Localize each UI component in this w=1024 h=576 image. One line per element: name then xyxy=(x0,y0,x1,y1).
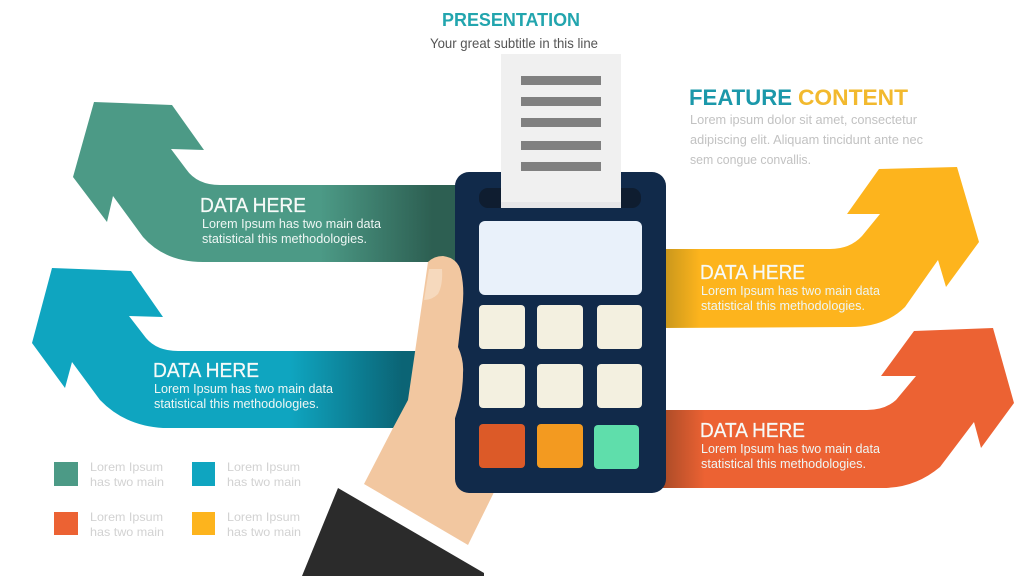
heading: green data: DATA HERE xyxy=(200,195,306,217)
legend item: yellow: Lorem Ipsum xyxy=(227,510,300,524)
text block: teal data xyxy=(154,382,333,411)
title: PRESENTATION xyxy=(442,10,580,30)
icon: payment terminal xyxy=(455,172,666,493)
text block: orange data: statistical this methodologies. xyxy=(701,457,866,471)
legend item: yellow xyxy=(192,510,301,539)
text block: green data xyxy=(202,217,381,246)
heading: feature content xyxy=(689,85,909,110)
arrow: teal xyxy=(32,268,425,428)
legend item: green: has two main xyxy=(90,475,164,489)
panel: orange arrow xyxy=(660,328,1014,488)
terminal body xyxy=(455,172,666,493)
text block: yellow data xyxy=(701,284,880,313)
legend item: green xyxy=(54,460,164,489)
title xyxy=(430,10,598,51)
panel: green arrow xyxy=(73,102,460,262)
panel: yellow arrow xyxy=(660,167,979,328)
keypad xyxy=(479,305,642,469)
legend item: teal: has two main xyxy=(227,475,301,489)
title: Your great subtitle in this line xyxy=(430,35,598,51)
text block: orange data xyxy=(701,442,880,471)
heading: feature content: CONTENT xyxy=(798,85,909,110)
icon: suit sleeve xyxy=(302,488,484,576)
legend item: green: Lorem Ipsum xyxy=(90,460,163,474)
text block: orange data: Lorem Ipsum has two main data xyxy=(701,442,880,456)
text block: feature description: sem congue convallis. xyxy=(690,153,811,167)
panel: feature content xyxy=(689,85,923,167)
legend item: teal: Lorem Ipsum xyxy=(227,460,300,474)
text block: green data: Lorem Ipsum has two main data xyxy=(202,217,381,231)
text block: teal data: Lorem Ipsum has two main data xyxy=(154,382,333,396)
panel: teal arrow xyxy=(32,268,425,428)
text block: feature description: adipiscing elit. Aliquam tincidunt ante nec xyxy=(690,133,923,147)
arrow: yellow xyxy=(660,167,979,328)
legend item: yellow: has two main xyxy=(227,525,301,539)
legend item: orange: has two main xyxy=(90,525,164,539)
text block: yellow data: Lorem Ipsum has two main data xyxy=(701,284,880,298)
legend xyxy=(54,460,301,539)
legend item: orange: Lorem Ipsum xyxy=(90,510,163,524)
receipt paper xyxy=(501,54,621,208)
heading: yellow data: DATA HERE xyxy=(700,262,805,284)
legend item: orange xyxy=(54,510,164,539)
card slot xyxy=(479,188,641,208)
icon: hand palm xyxy=(364,400,500,545)
text block: yellow data: statistical this methodologies. xyxy=(701,299,865,313)
text block: green data: statistical this methodologies. xyxy=(202,232,367,246)
heading: feature content: FEATURE xyxy=(689,85,792,110)
icon: thumb xyxy=(393,256,463,460)
arrow: green xyxy=(73,102,460,262)
text block: feature description xyxy=(690,113,923,167)
heading: orange data: DATA HERE xyxy=(700,420,805,442)
heading: teal data: DATA HERE xyxy=(153,360,259,382)
text block: teal data: statistical this methodologies. xyxy=(154,397,319,411)
arrow: orange xyxy=(660,328,1014,488)
text block: feature description: Lorem ipsum dolor sit amet, consectetur xyxy=(690,113,917,127)
screen xyxy=(479,221,642,295)
thumbnail highlight xyxy=(424,269,442,300)
legend item: teal xyxy=(192,460,301,489)
